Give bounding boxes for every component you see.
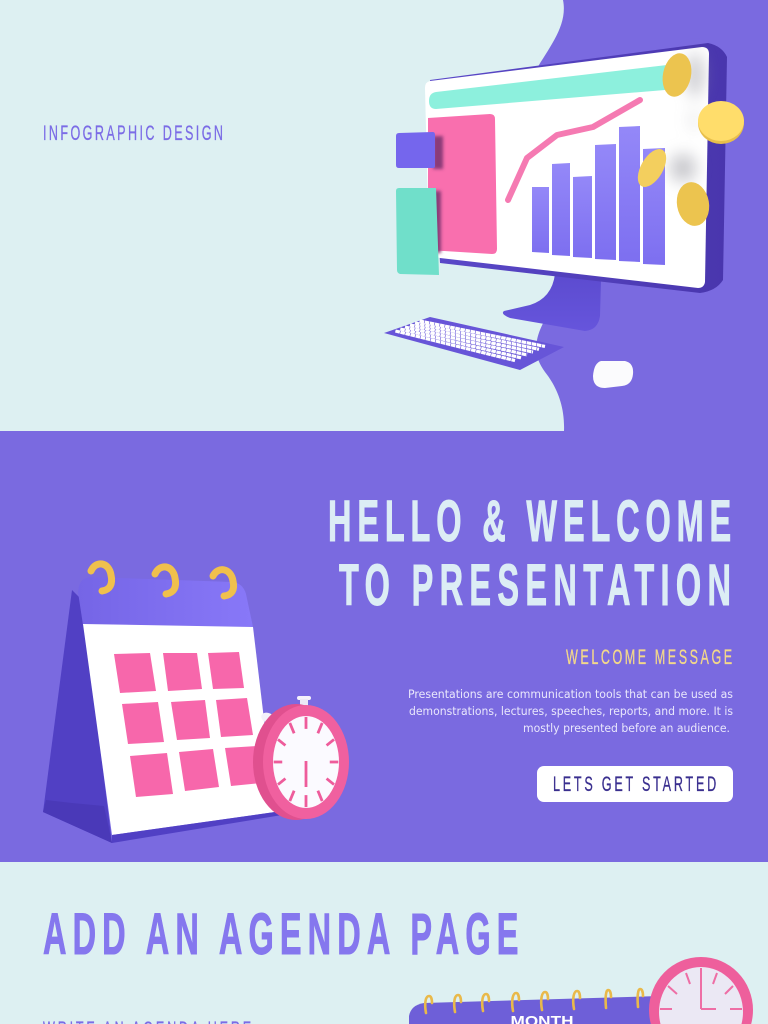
calendar header [78, 577, 253, 627]
bar chart [532, 126, 665, 265]
button: lets get started [537, 766, 733, 802]
keyboard [384, 317, 564, 370]
heading: add an agenda page: ADD AN AGENDA PAGE [43, 901, 518, 966]
teal tile [396, 188, 439, 275]
month calendar band [409, 996, 660, 1024]
icon: desk calendar with stopwatch [43, 564, 349, 843]
pink panel shadow [433, 136, 443, 253]
monitor back shell [430, 43, 727, 293]
pink panel [428, 114, 497, 254]
paragraph: welcome text [408, 688, 733, 735]
panel: welcome section background [0, 431, 768, 862]
purple square [396, 132, 435, 168]
panel: agenda section background [0, 862, 768, 1024]
calendar rings [91, 564, 234, 596]
mouse [593, 361, 633, 388]
panel: hero background [0, 0, 768, 431]
spiral rings [425, 989, 643, 1013]
calendar base strip [112, 812, 282, 843]
line chart [508, 100, 640, 200]
stopwatch [253, 696, 349, 820]
calendar date cells [114, 652, 262, 797]
gold coins [632, 51, 744, 228]
teal header bar [429, 65, 667, 109]
monitor stand [503, 274, 601, 331]
hero label: INFOGRAPHIC DESIGN [43, 121, 223, 145]
coin shadows [670, 53, 703, 182]
calendar page [83, 624, 275, 835]
heading: hello and welcome: HELLO & WELCOME [328, 488, 731, 553]
icon: month calendar with clock [409, 957, 753, 1024]
paragraph: welcome text: mostly presented before an audience. [523, 722, 730, 735]
heading: to presentation: TO PRESENTATION [339, 552, 731, 617]
paragraph: welcome text: Presentations are communication tools that can be used as [408, 688, 733, 701]
paragraph: welcome text: demonstrations, lectures, speeches, reports, and more. It is [409, 705, 733, 718]
button: lets get started: LETS GET STARTED [553, 772, 716, 796]
monitor screen [425, 47, 709, 288]
icon: 3D monitor illustration [384, 43, 744, 388]
clock [649, 957, 753, 1024]
calendar back stand [43, 590, 112, 843]
subheading: welcome message: WELCOME MESSAGE [566, 645, 732, 669]
